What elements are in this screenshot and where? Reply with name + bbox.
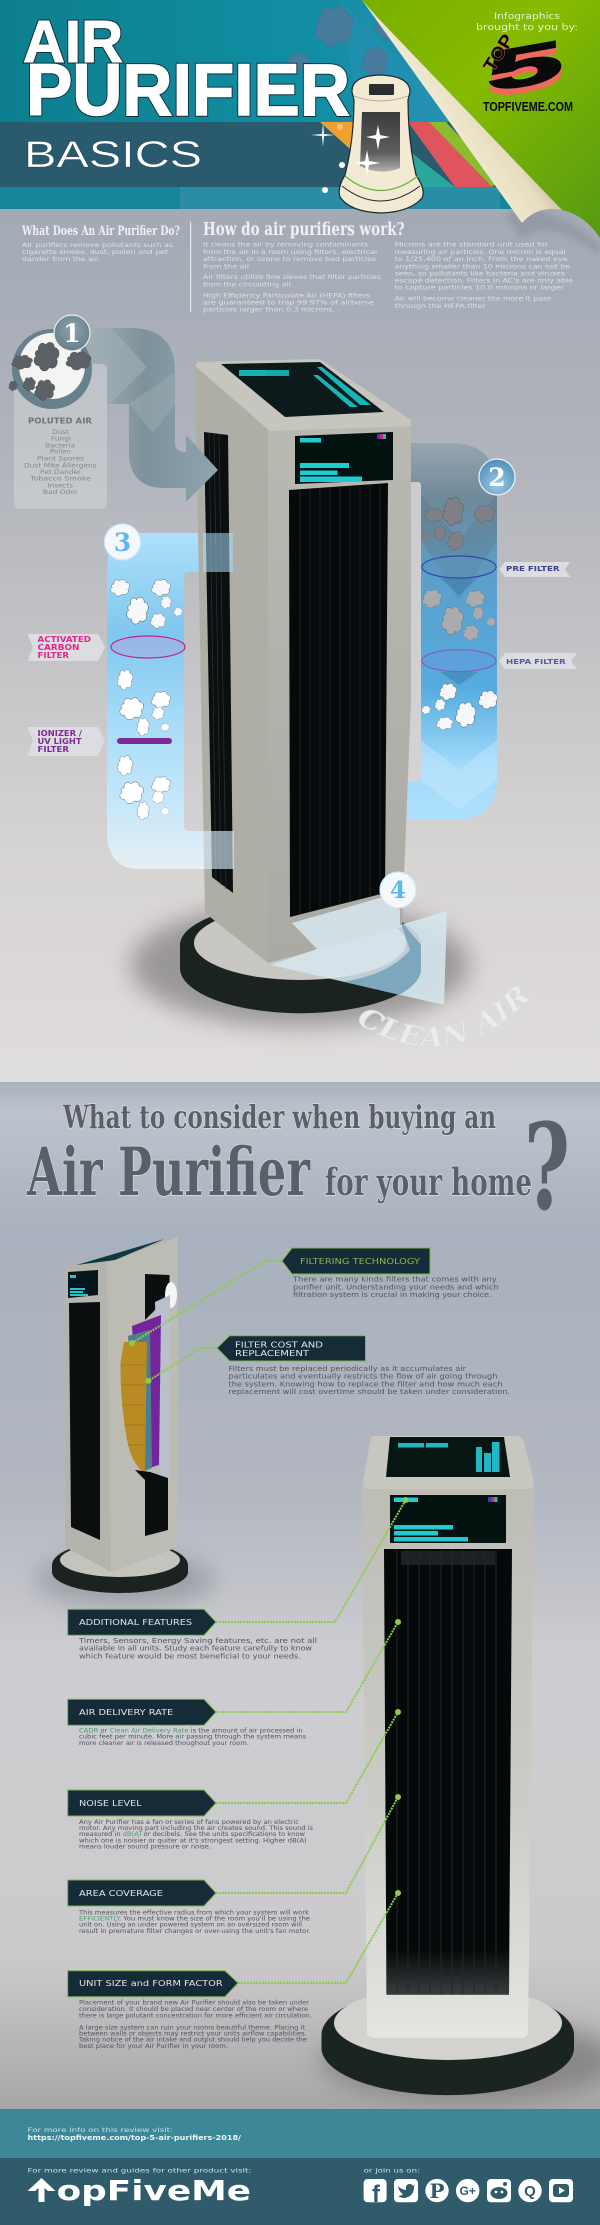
floor shadow under main purifier	[130, 903, 470, 1027]
badge: step 1	[54, 315, 90, 351]
top 5 logo: 5	[487, 28, 563, 104]
main purifier	[180, 359, 421, 1013]
clouds: dirty air before pre filter	[422, 497, 495, 550]
tower top face	[195, 359, 411, 431]
badge: step 4	[380, 872, 416, 908]
paragraph: microns column: to capture particles 10.0 microns or larger.	[395, 284, 566, 292]
clean air channel overlay on tower	[203, 533, 234, 869]
description: filtering technology: There are many kinds filters that comes with any	[292, 1276, 497, 1284]
description: additional features: which feature would be most beneficial to your needs.	[79, 1652, 301, 1660]
large vent	[384, 1549, 512, 1995]
description: unit size	[78, 2001, 312, 2050]
list of pollutants: Dust	[52, 429, 70, 436]
paragraph: microns column: anything smaller than 10 microns can not be	[395, 262, 570, 270]
intro text	[21, 220, 573, 314]
paragraph: how column: from the air in a room using filters, electrical	[203, 248, 377, 256]
badge: step 2	[479, 459, 515, 495]
front display	[295, 432, 393, 484]
paragraph: how column	[203, 241, 382, 314]
list of pollutants: Insects	[48, 482, 73, 489]
description: noise level	[79, 1820, 313, 1851]
description: unit size: A large size system can ruin your rooms beautiful theme. Placing it	[79, 2025, 306, 2031]
label: hepa filter: HEPA FILTER	[506, 657, 566, 666]
paragraph: how column: from the circulating air.	[203, 280, 294, 288]
list of pollutants: Plant Spores	[37, 456, 84, 463]
large display	[390, 1495, 506, 1543]
clouds: step 3 middle	[117, 670, 171, 736]
label: pre filter	[499, 562, 570, 577]
description: unit size: consideration. It should be placed near center of the room or where	[79, 2007, 309, 2013]
heading: polluted air: POLUTED AIR	[28, 416, 92, 426]
clouds: grey air after pre filter	[423, 590, 495, 640]
list of pollutants: Dust Mite Allergens	[24, 462, 96, 469]
smoke clouds	[287, 6, 404, 76]
footer: review link: https://topfiveme.com/top-5-air-purifiers-2018/	[28, 2134, 242, 2142]
badge: step 3: 3	[114, 528, 131, 557]
ionizer bar	[117, 738, 172, 744]
icon: polluted air circle	[9, 329, 92, 409]
panel: polluted air	[14, 364, 107, 509]
header banner	[0, 0, 600, 209]
list of pollutants: Pollen	[50, 449, 71, 456]
description: air delivery rate: more cleaner air is released thoughout your room.	[79, 1741, 249, 1747]
section title: what to consider	[26, 1098, 570, 1238]
callout: filtering technology: FILTERING TECHNOLOGY	[300, 1257, 420, 1266]
clean air curved label: CLEAN AIR	[358, 986, 530, 1046]
badge: step 2: 2	[488, 463, 506, 492]
description: filter cost: Filters must be replaced periodically as it accumulates air	[228, 1365, 466, 1373]
list of pollutants: Bad Odor	[43, 489, 79, 496]
green corner	[362, 0, 600, 238]
description: filtering technology: filtration system is crucial in making your choice.	[293, 1291, 492, 1299]
description: noise level: which one is noisier or quiter at it's strongest setting. Higher dB(A)	[79, 1838, 307, 1844]
description: unit size: Placement of your brand new Air Purifier should also be taken under	[79, 2001, 310, 2007]
callout: unit size and form factor: UNIT SIZE and FORM FACTOR	[79, 1979, 224, 1988]
list of pollutants: Bacteria	[45, 442, 75, 449]
paragraph: microns column	[395, 241, 573, 310]
cream flap	[362, 0, 562, 223]
paragraph: microns column: Air will become cleaner the more it pass	[395, 295, 552, 303]
callout: additional features: ADDITIONAL FEATURES	[79, 1618, 192, 1627]
large purifier	[320, 1436, 600, 2100]
callout: area coverage: AREA COVERAGE	[79, 1889, 163, 1898]
clouds: step 3 upper	[111, 579, 182, 628]
description: additional features: Timers, Sensors, Energy Saving features, etc. are not all	[78, 1637, 317, 1645]
description: additional features: available in all units. Study each feature carefully to know	[79, 1645, 312, 1653]
yellow pleated filter	[120, 1342, 147, 1473]
brand logo: opFiveMe	[57, 2174, 251, 2207]
background: second section	[0, 1082, 600, 2109]
small cutaway purifier	[35, 1237, 215, 1606]
description: unit size: Taking notice of the air intake and output should help you decide the	[78, 2038, 308, 2044]
icon: facebook	[364, 2179, 387, 2208]
top 5 logo: TOPFIVEME.COM	[483, 99, 573, 114]
arrow: polluted air intake	[72, 328, 218, 502]
heading: how do: How do air purifiers work?	[203, 220, 404, 240]
list of pollutants: Fungi	[51, 436, 71, 443]
footer: review link	[0, 2109, 600, 2158]
description: unit size: best place for your Air Purifier in your room.	[79, 2044, 228, 2050]
arrow: clean air channel (step 3)	[107, 533, 234, 869]
list of pollutants	[24, 429, 96, 496]
callout: air delivery rate: AIR DELIVERY RATE	[79, 1708, 174, 1717]
sparkles	[311, 123, 390, 193]
description: unit size: there is large polutant concentration for more efficient air circulation.	[79, 2013, 312, 2019]
hepa filter ellipse	[422, 650, 496, 672]
cutaway top vent	[145, 1274, 170, 1320]
silver filter layer	[155, 1295, 170, 1480]
badge: step 4: 4	[390, 877, 406, 904]
page curl with sponsor logo	[362, 0, 600, 255]
footer: brand and social	[0, 2158, 600, 2225]
activated carbon filter ellipse	[111, 636, 185, 658]
white puff	[165, 1282, 177, 1308]
callout: noise level	[68, 1709, 401, 1851]
icon: youtube	[549, 2179, 573, 2202]
description: air delivery rate: CADR or Clean Air Delivery Rate is the amount of air processed in	[79, 1728, 303, 1734]
label: ionizer uv light filter: UV LIGHT	[38, 737, 82, 746]
small base disk	[52, 1541, 188, 1593]
description: area coverage: unit on. Using an under powered system on an oversized room will	[79, 1923, 302, 1929]
title: purifier: PURIFIER	[26, 50, 350, 131]
label: ionizer uv light filter: IONIZER /	[38, 729, 82, 738]
front vent	[289, 483, 388, 917]
paragraph: what does: cigarette smoke, dust, pollen and pet	[22, 248, 169, 256]
large tower front	[362, 1487, 534, 2038]
paragraph: how column: High Efficiency Particulate Air (HEPA) filters	[203, 291, 371, 299]
paragraph: how column: are guaranteed to trap 99.97% of airborne	[203, 299, 374, 307]
small front vent	[69, 1302, 100, 1540]
paragraph: how column: attraction, or ozone to remove bad particles	[203, 255, 377, 263]
callout: filter cost and replacement	[146, 1336, 510, 1396]
section title: what to consider: Air Purifier	[26, 1133, 311, 1211]
large base disk	[322, 1986, 574, 2095]
top screen	[221, 362, 384, 417]
label: ionizer uv light filter: FILTER	[38, 745, 69, 754]
title: purifier weight: PURIFIER	[26, 50, 350, 131]
paragraph: how column: particles larger than 0.3 microns.	[203, 306, 335, 314]
callout: filtering technology	[129, 1248, 499, 1346]
icon: reddit	[487, 2179, 511, 2202]
label: hepa filter	[499, 653, 577, 669]
footer: brand and social: For more review and guides for other product visit:	[28, 2166, 251, 2174]
description: filter cost: replacement will cost overtime should be taken under consideration.	[228, 1388, 510, 1396]
cutaway bottom vent	[135, 1470, 168, 1536]
description: area coverage: This measures the effective radius from which your system will work	[78, 1910, 310, 1916]
icon: twitter	[394, 2179, 418, 2202]
list of pollutants: Tobacco Smoke	[29, 476, 91, 483]
title: air: AIR	[23, 9, 123, 75]
description: additional features	[78, 1637, 317, 1660]
paragraph: what does: dander from the air.	[22, 255, 100, 263]
large tower top	[363, 1436, 534, 1489]
mini purifier screen	[369, 84, 394, 95]
small tower body	[65, 1237, 178, 1572]
description: area coverage	[78, 1910, 311, 1935]
description: noise level: Any Air Purifier has a fan or series of fans powered by an electric	[79, 1820, 299, 1826]
small display	[68, 1270, 98, 1298]
title: air weight: AIR	[23, 9, 123, 75]
paragraph: microns column: Microns are the standard unit used for	[395, 241, 548, 249]
paragraph: microns column: escape detection. Filters in AC's are only able	[395, 277, 573, 285]
description: area coverage: EFFICIENTLY. You must know the size of the room you'll be using the	[79, 1916, 311, 1922]
brand logo	[28, 2174, 251, 2207]
paragraph: microns column: seen, so pollutants like bacteria and viruses	[395, 269, 566, 277]
tower front face	[268, 425, 411, 963]
paragraph: microns column: through the HEPA filter	[395, 302, 486, 310]
base disk	[180, 903, 421, 1013]
label: activated carbon filter: ACTIVATED	[38, 635, 91, 644]
description: noise level: measured in dB(A) or decibels. See the units specifications to know	[79, 1832, 305, 1838]
coloured stripes	[320, 122, 500, 187]
section title: what to consider: ?	[524, 1098, 570, 1238]
footer: brand and social: or join us on:	[364, 2166, 420, 2174]
badge: step 3	[104, 524, 140, 560]
callout: unit size and form factor	[68, 1890, 401, 2050]
infographics credit	[476, 12, 578, 33]
callout: air delivery rate	[68, 1619, 401, 1747]
icon: quora	[518, 2179, 542, 2202]
header dark band	[0, 122, 600, 187]
footer: review link: For more info on this review visit:	[28, 2126, 173, 2134]
description: air delivery rate: cubic feet per minute. More air passing through the system means	[79, 1735, 306, 1741]
paragraph: how column: Air filters utilize fine sieves that filter particles	[203, 273, 382, 281]
purple filter layer	[132, 1315, 161, 1470]
icon: google plus: G+	[460, 2184, 476, 2198]
mini purifier illustration	[311, 75, 423, 213]
icon: quora: Q	[524, 2183, 536, 2200]
badge: step 1: 1	[63, 319, 81, 348]
top 5 logo: 5	[487, 34, 563, 110]
icon: google plus	[456, 2179, 479, 2202]
icon: facebook: f	[372, 2181, 381, 2208]
paragraph: microns column: measuring air particles. One micron is equal	[395, 248, 566, 256]
description: filter cost: the system. Knowing how to replace the filter and how much each	[228, 1380, 502, 1388]
mini purifier window	[360, 112, 400, 172]
side vent	[204, 432, 233, 893]
label: activated carbon filter	[28, 634, 105, 661]
description: filter cost	[228, 1365, 510, 1396]
description: air delivery rate	[79, 1728, 306, 1747]
clouds: step 3 lower	[117, 756, 171, 820]
description: area coverage: result in premature filter changes or over-using the unit's fan motor.	[79, 1929, 311, 1935]
description: filtering technology: purifier unit. Understanding your needs and which	[293, 1283, 499, 1291]
paragraph: microns column: to 1/25,400 of an inch. From the naked eye	[395, 255, 568, 263]
label: pre filter: PRE FILTER	[506, 564, 560, 573]
infographics credit: brought to you by:	[476, 23, 578, 33]
title: basics: BASICS	[24, 134, 202, 175]
infographics credit: Infographics	[494, 12, 561, 22]
pre filter ellipse	[422, 556, 496, 578]
icon: pinterest: P	[429, 2179, 445, 2203]
grey-blue filter layer	[128, 1330, 152, 1472]
top 5 logo: TOP	[479, 31, 518, 75]
description: filter cost: particulates and eventually restricts the flow of air going through	[228, 1373, 498, 1381]
list of pollutants: Pet Dander	[40, 469, 82, 476]
description: noise level: means louder sound pressure or noise.	[79, 1845, 211, 1851]
large top screen	[386, 1437, 510, 1477]
label: ionizer uv light filter	[28, 727, 105, 756]
callout: filter cost and replacement: FILTER COST AND	[235, 1340, 323, 1350]
callout: filter cost and replacement: REPLACEMENT	[235, 1349, 309, 1358]
paragraph: how column: from the air	[203, 262, 250, 270]
arrow: clean air output	[271, 897, 447, 1010]
label: activated carbon filter: CARBON	[38, 643, 80, 652]
paragraph: what does: Air purifiers remove pollutants such as	[22, 241, 174, 249]
description: noise level: motor. Any moving part including the air creates sound. This sound is	[79, 1826, 313, 1832]
callout: additional features	[68, 1497, 409, 1660]
callout: area coverage	[68, 1794, 401, 1935]
callout: noise level: NOISE LEVEL	[79, 1799, 143, 1808]
icon: pinterest	[425, 2179, 449, 2203]
label: activated carbon filter: FILTER	[38, 651, 69, 660]
tower left face	[195, 365, 268, 963]
clouds: clean air after hepa	[422, 683, 498, 730]
heading: what does: What Does An Air Purifier Do?	[21, 224, 180, 239]
description: unit size: between walls or objects may restrict your units airflow capabilities.	[79, 2032, 307, 2038]
arrow: filtering channel (step 2)	[404, 443, 497, 820]
small top screen	[76, 1239, 164, 1265]
description: filtering technology	[292, 1276, 499, 1299]
paragraph: how column: It cleans the air by removing contaminants	[203, 241, 369, 249]
paragraph: what does	[22, 241, 174, 263]
background: first section	[0, 209, 600, 1082]
